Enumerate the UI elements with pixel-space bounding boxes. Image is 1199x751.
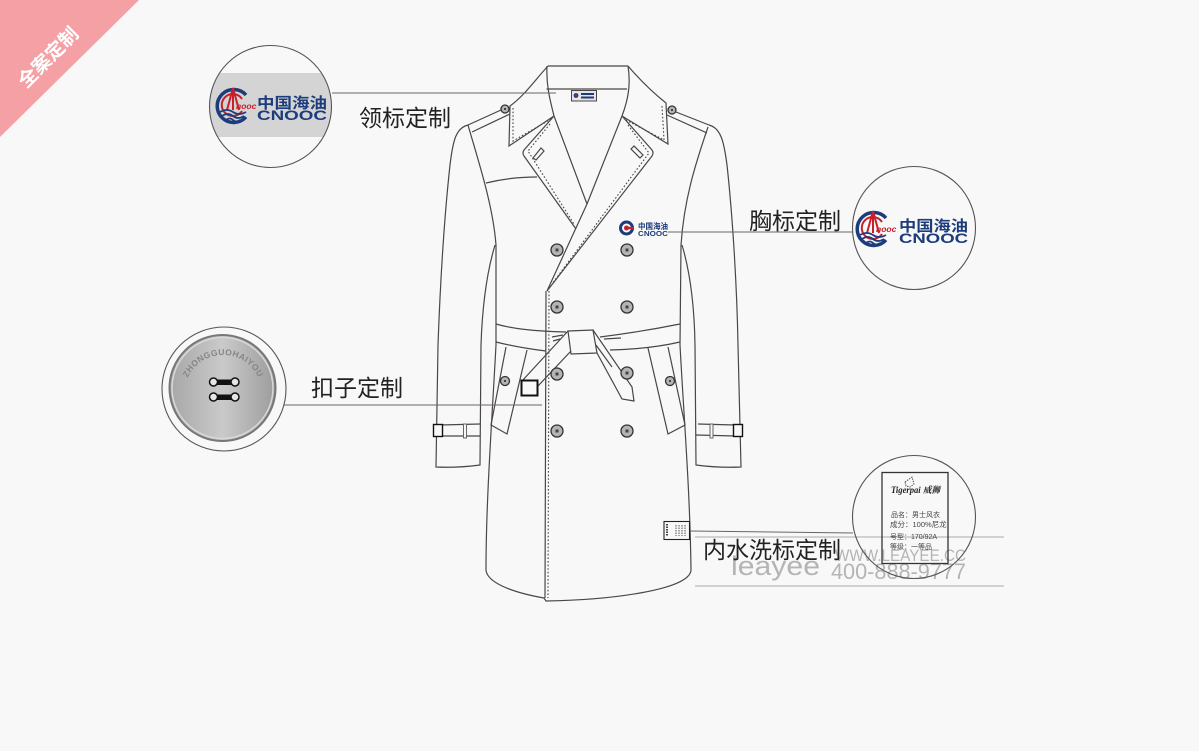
caption: 领标定制: 领标定制 <box>359 105 451 131</box>
chest logo circle: CNOOC <box>899 231 968 246</box>
coat outline: sleeves and body <box>436 125 741 601</box>
belt and buckle <box>496 324 680 401</box>
wash label tag: 号型：170/92A <box>890 532 937 541</box>
icon: CNOOC emblem: nooc <box>876 224 897 234</box>
chest logo on coat: CNOOC <box>638 231 668 238</box>
trench coat drawing <box>434 66 742 601</box>
collar logo circle: CNOOC <box>257 108 327 123</box>
icon: metal button: ZHONGGUOHAIYOU <box>182 349 263 378</box>
wash label tag: 成分：100%尼龙 <box>890 519 947 529</box>
collar and lapels <box>468 66 709 291</box>
caption: 胸标定制: 胸标定制 <box>749 208 841 234</box>
icon: CNOOC emblem: nooc <box>236 101 257 111</box>
caption: 扣子定制: 扣子定制 <box>311 375 403 401</box>
leader line: button <box>284 404 542 406</box>
corner ribbon: 全案定制: 全案定制 <box>13 22 83 92</box>
cuff straps <box>434 424 742 438</box>
chest logo circle <box>852 166 976 290</box>
leader line: chest <box>668 231 855 233</box>
watermark <box>695 537 1004 586</box>
pockets <box>491 347 685 434</box>
collar logo circle: 中国海油 <box>257 94 327 112</box>
chest logo circle: 中国海油 <box>899 217 968 235</box>
chest logo on coat: 中国海油 <box>638 221 668 231</box>
watermark: WWW.LEAYEE.CC <box>835 546 966 565</box>
button circle <box>161 326 287 452</box>
collar label patch <box>572 90 596 101</box>
wash label tag: Tigerpai 威狮 <box>891 485 942 495</box>
wash label tag <box>882 472 948 564</box>
coat buttons <box>500 105 676 437</box>
leader line: wash label <box>690 531 853 533</box>
watermark: 400-888-9777 <box>831 559 966 584</box>
collar logo circle <box>205 46 335 168</box>
wash label tag: 品名：男士风衣 <box>891 510 940 519</box>
watermark: leayee <box>731 551 820 581</box>
corner ribbon: 全案定制 <box>0 0 139 137</box>
wash label patch on hem <box>664 522 690 540</box>
wash label tag: 等级：一等品 <box>890 542 932 551</box>
front placket <box>545 291 549 598</box>
wash label circle <box>852 456 976 578</box>
chest logo on coat <box>620 221 668 238</box>
leader line: collar <box>332 92 556 94</box>
caption: 内水洗标定制: 内水洗标定制 <box>703 537 841 563</box>
